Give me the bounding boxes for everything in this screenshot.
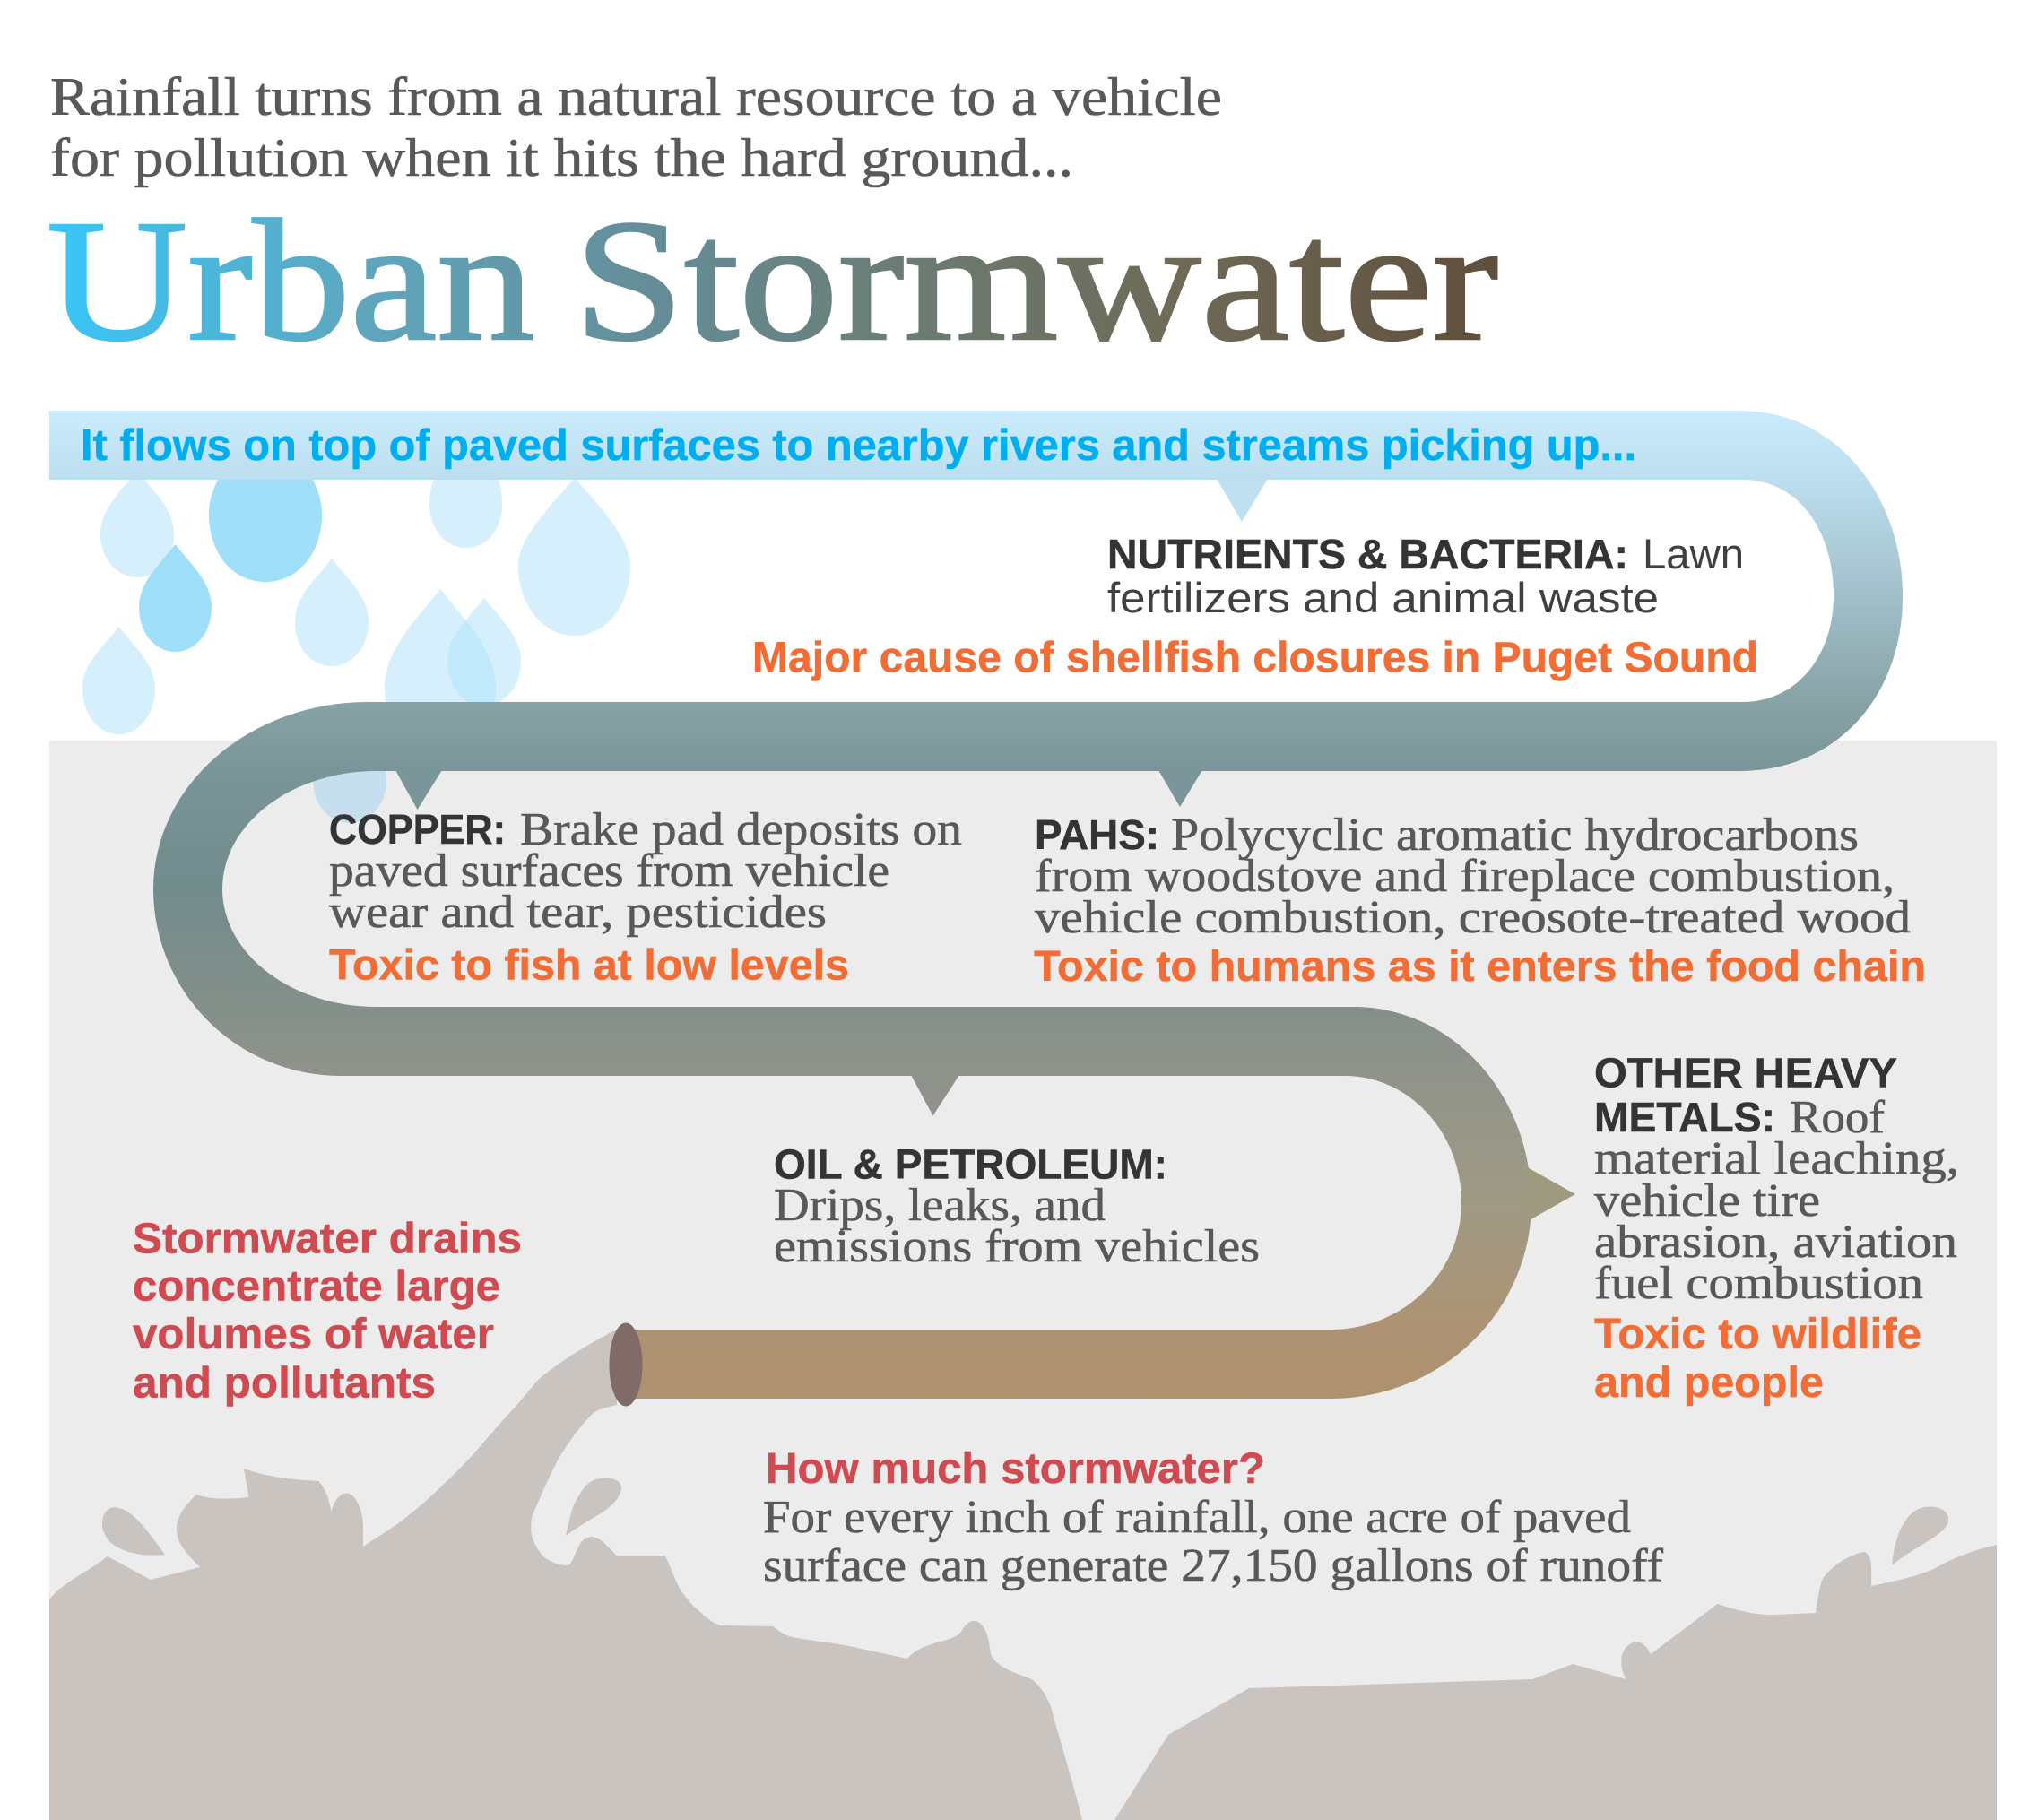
arrow: nutrients pointer [1217, 479, 1268, 522]
text block: nutrients and bacteria [752, 530, 1758, 681]
text block: copper: wear and tear, pesticides [329, 887, 827, 938]
text block: other heavy metals [1594, 1049, 1959, 1407]
text block: copper: Toxic to fish at low levels [329, 941, 849, 990]
text block: PAHs: vehicle combustion, creosote-treated wood [1035, 892, 1911, 943]
arrow: copper pointer [395, 770, 442, 810]
text block: copper: paved surfaces from vehicle [329, 845, 889, 897]
text block: other heavy metals: material leaching, [1594, 1133, 1959, 1184]
arrow: heavy metals pointer [1522, 1165, 1575, 1221]
ground: polluted runoff silhouette [49, 1330, 1997, 1820]
text block: how much stormwater: surface can generate 27,150 gallons of runoff [763, 1540, 1664, 1591]
winding stormwater pipe [49, 411, 1903, 1399]
intro text: for pollution when it hits the hard ground... [50, 128, 1073, 187]
callout: stormwater drains: and pollutants [133, 1359, 436, 1408]
text block: other heavy metals: OTHER HEAVY [1594, 1049, 1897, 1096]
text block: copper [329, 804, 962, 990]
text block: nutrients and bacteria: fertilizers and animal waste [1107, 574, 1659, 621]
title [47, 184, 1498, 377]
text block: oil and petroleum: OIL & PETROLEUM: [774, 1140, 1167, 1187]
callout: stormwater drains: volumes of water [133, 1311, 494, 1358]
text block: nutrients and bacteria: Major cause of shellfish closures in Puget Sound [752, 635, 1758, 681]
title: Stormwater [574, 184, 1498, 377]
text block: how much stormwater: For every inch of rainfall, one acre of paved [763, 1492, 1631, 1543]
text block: PAHs: Toxic to humans as it enters the food chain [1034, 943, 1926, 991]
text block: oil and petroleum: Drips, leaks, and [774, 1180, 1106, 1231]
text block: other heavy metals: Roof [1790, 1092, 1886, 1143]
intro text [50, 67, 1222, 187]
text block: other heavy metals: Toxic to wildlife [1594, 1311, 1921, 1358]
text block: PAHs [1034, 810, 1926, 991]
text block: nutrients and bacteria: NUTRIENTS & BACTERIA: [1107, 531, 1628, 577]
text block: other heavy metals: vehicle tire [1594, 1175, 1820, 1226]
text block: PAHs: PAHS: [1035, 811, 1159, 858]
callout: stormwater drains: Stormwater drains [133, 1216, 522, 1262]
callout: stormwater drains [133, 1216, 522, 1408]
intro text: Rainfall turns from a natural resource to a vehicle [50, 67, 1222, 126]
text block: other heavy metals: abrasion, aviation [1594, 1217, 1957, 1268]
ground panel background [49, 741, 1997, 1820]
text block: oil and petroleum: emissions from vehicles [774, 1221, 1260, 1272]
text block: nutrients and bacteria: Lawn [1643, 530, 1744, 577]
arrow: oil pointer [911, 1075, 959, 1115]
text block: other heavy metals: METALS: [1594, 1094, 1775, 1140]
text block: PAHs: from woodstove and fireplace combustion, [1035, 851, 1895, 902]
title: Urban [47, 184, 534, 377]
text block: how much stormwater [763, 1445, 1664, 1591]
text block: other heavy metals: fuel combustion [1594, 1258, 1923, 1309]
text block: PAHs: Polycyclic aromatic hydrocarbons [1171, 810, 1859, 861]
text block: copper: Brake pad deposits on [520, 804, 962, 855]
flow banner text: It flows on top of paved surfaces to nearby rivers and streams picking up... [81, 421, 1636, 470]
text block: other heavy metals: and people [1594, 1359, 1824, 1407]
text block: how much stormwater: How much stormwater? [766, 1445, 1265, 1493]
text block: oil and petroleum [774, 1140, 1260, 1272]
text block: copper: COPPER: [329, 806, 506, 853]
arrow: PAHs pointer [1158, 770, 1202, 807]
icon: raindrops [82, 421, 630, 823]
callout: stormwater drains: concentrate large [133, 1262, 500, 1311]
pipe outlet [610, 1323, 642, 1406]
